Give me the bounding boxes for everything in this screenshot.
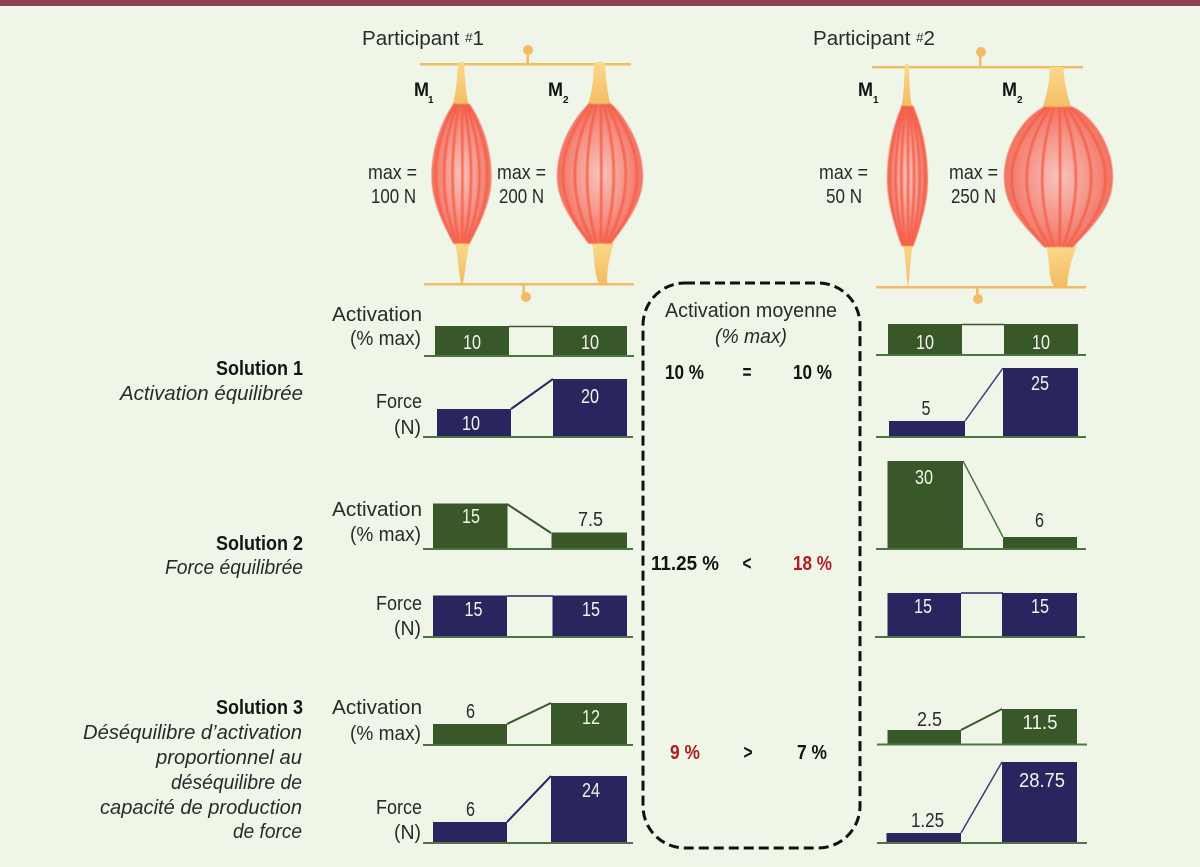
solution 2 heading: Solution 2 [216, 533, 303, 555]
heading: participant 1: Participant [362, 28, 456, 50]
chart: participant 2, solution 3 force [877, 762, 1087, 844]
chart: participant 1, solution 2 force [423, 596, 633, 638]
panel heading: Activation moyenne [665, 300, 837, 322]
solution 3 heading: Déséquilibre d’activation [83, 722, 302, 744]
muscle diagram: participant 2 [872, 47, 1113, 304]
chart: participant 1, solution 3 force [423, 776, 633, 844]
comparison: solution 1: 10 % [793, 362, 832, 384]
chart: participant 2, solution 3 activation: 2.5 [917, 709, 942, 731]
chart: participant 1, solution 1 force [423, 379, 633, 438]
solution 3 heading: Solution 3 [216, 697, 303, 719]
comparison: solution 3: > [744, 742, 752, 764]
panel: activation moyenne [643, 283, 860, 848]
chart: participant 1, solution 3 activation [423, 701, 633, 746]
muscle labels [414, 80, 1023, 106]
chart: participant 2, solution 1 force: 25 [1031, 373, 1049, 395]
chart: participant 1, solution 2 activation [423, 504, 633, 550]
solution 3 heading [83, 697, 303, 843]
chart: participant 1, solution 1 activation: 10 [463, 332, 481, 354]
max force labels: max = [368, 162, 417, 184]
chart: participant 2, solution 2 activation: 6 [1035, 510, 1044, 532]
axis labels: (N) [394, 618, 421, 640]
chart: participant 1, solution 2 force: 15 [582, 599, 600, 621]
solution 3 heading: déséquilibre de [171, 772, 302, 794]
max force labels: 100 N [371, 186, 416, 208]
solution 2 heading: Force équilibrée [165, 557, 303, 579]
axis labels: (% max) [350, 328, 421, 350]
solution 1 heading: Activation équilibrée [119, 383, 303, 405]
heading: participant 2: Participant [813, 28, 908, 50]
axis labels: (N) [394, 822, 421, 844]
solution 2 heading [165, 533, 303, 579]
muscle labels: M [548, 80, 563, 101]
solution 3 heading: proportionnel au [155, 747, 302, 769]
comparison: solution 3: 9 % [670, 742, 700, 764]
solution 3 heading: de force [233, 821, 302, 843]
panel heading [665, 300, 837, 348]
chart: participant 2, solution 1 activation: 10 [1032, 332, 1050, 354]
chart: participant 1, solution 2 activation: 7.5 [578, 509, 603, 531]
heading: participant 1: # [465, 30, 473, 45]
axis labels [332, 304, 422, 844]
chart: participant 1, solution 3 activation: 12 [582, 707, 600, 729]
muscle diagram: participant 1 [420, 45, 643, 302]
axis labels: Force [376, 391, 422, 413]
heading: participant 2: 2 [924, 28, 935, 50]
comparison: solution 3 [670, 742, 827, 764]
max force labels [368, 162, 998, 208]
chart: participant 1, solution 3 activation: 6 [466, 701, 475, 723]
axis labels: (% max) [350, 524, 421, 546]
chart: participant 2, solution 3 activation: 11.5 [1022, 712, 1058, 734]
axis labels: (N) [394, 417, 421, 439]
muscle labels: M [858, 80, 873, 101]
max force labels: max = [949, 162, 998, 184]
chart: participant 1, solution 1 activation: 10 [581, 332, 599, 354]
solution 3 heading: capacité de production [100, 797, 302, 819]
chart: participant 2, solution 2 activation [876, 461, 1086, 550]
max force labels: max = [497, 162, 546, 184]
solution 1 heading [119, 358, 303, 405]
max force labels: 200 N [499, 186, 544, 208]
chart: participant 2, solution 3 activation [877, 709, 1087, 746]
max force labels: 250 N [951, 186, 996, 208]
chart: participant 2, solution 1 force: 5 [922, 398, 930, 420]
chart: participant 2, solution 2 force: 15 [914, 596, 932, 618]
axis labels: Force [376, 797, 422, 819]
axis labels: Activation [332, 304, 422, 326]
axis labels: Activation [332, 499, 422, 521]
chart: participant 1, solution 1 force: 20 [581, 386, 599, 408]
chart: participant 2, solution 1 force [876, 368, 1086, 438]
muscle labels: 2 [563, 95, 569, 106]
axis labels: (% max) [350, 723, 421, 745]
muscle labels: M [414, 80, 429, 101]
muscle labels: 1 [428, 95, 434, 106]
chart: participant 2, solution 2 activation: 30 [915, 467, 933, 489]
max force labels: 50 N [826, 186, 862, 208]
chart: participant 1, solution 3 force: 6 [466, 799, 475, 821]
chart: participant 1, solution 1 activation [424, 326, 634, 357]
max force labels: max = [819, 162, 868, 184]
heading: participant 1: 1 [473, 28, 484, 50]
chart: participant 2, solution 1 activation: 10 [916, 332, 934, 354]
axis labels: Force [376, 593, 422, 615]
chart: participant 2, solution 2 force [875, 593, 1085, 638]
chart: participant 2, solution 3 force: 1.25 [911, 810, 944, 832]
comparison: solution 1: 10 % [665, 362, 704, 384]
chart: participant 1, solution 3 force: 24 [582, 780, 600, 802]
comparison: solution 2 [651, 553, 832, 575]
chart: participant 2, solution 2 force: 15 [1031, 596, 1049, 618]
comparison: solution 1: = [742, 362, 752, 384]
muscle labels: 1 [873, 95, 879, 106]
solution 1 heading: Solution 1 [216, 358, 303, 380]
muscle labels: M [1002, 80, 1017, 101]
comparison: solution 3: 7 % [797, 742, 827, 764]
panel heading: (% max) [715, 326, 787, 348]
chart: participant 2, solution 3 force: 28.75 [1019, 770, 1065, 792]
chart: participant 2, solution 1 activation [876, 324, 1086, 356]
comparison: solution 2: 11.25 % [651, 553, 719, 575]
chart: participant 1, solution 2 force: 15 [464, 599, 482, 621]
heading: participant 2: # [916, 30, 924, 45]
chart: participant 1, solution 2 activation: 15 [462, 506, 480, 528]
comparison: solution 1 [665, 362, 832, 384]
axis labels: Activation [332, 697, 422, 719]
comparison: solution 2: 18 % [793, 553, 832, 575]
comparison: solution 2: < [742, 553, 752, 575]
muscle labels: 2 [1017, 95, 1023, 106]
chart: participant 1, solution 1 force: 10 [462, 413, 480, 435]
top border [0, 0, 1200, 6]
